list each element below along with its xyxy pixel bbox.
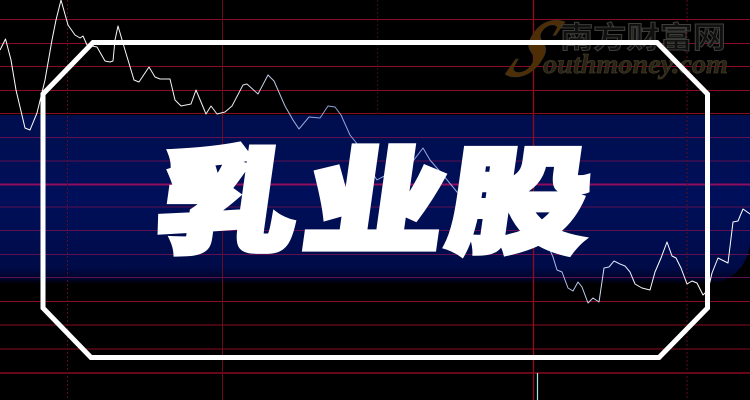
blue band bbox=[0, 115, 750, 284]
title character: 业: 业 bbox=[295, 111, 459, 277]
watermark url: outhmoney.com bbox=[543, 49, 728, 79]
price line chart bbox=[0, 0, 750, 303]
volume tick bbox=[536, 373, 538, 400]
octagonal white frame bbox=[43, 42, 708, 358]
watermark chinese name: 南方财富网 bbox=[560, 22, 726, 55]
watermark letter S: S bbox=[492, 2, 579, 95]
watermark: 南方财富网 Southmoney.com bbox=[492, 2, 728, 95]
title character: 乳: 乳 bbox=[148, 111, 312, 277]
title bbox=[148, 111, 603, 277]
title character: 股: 股 bbox=[439, 111, 603, 277]
